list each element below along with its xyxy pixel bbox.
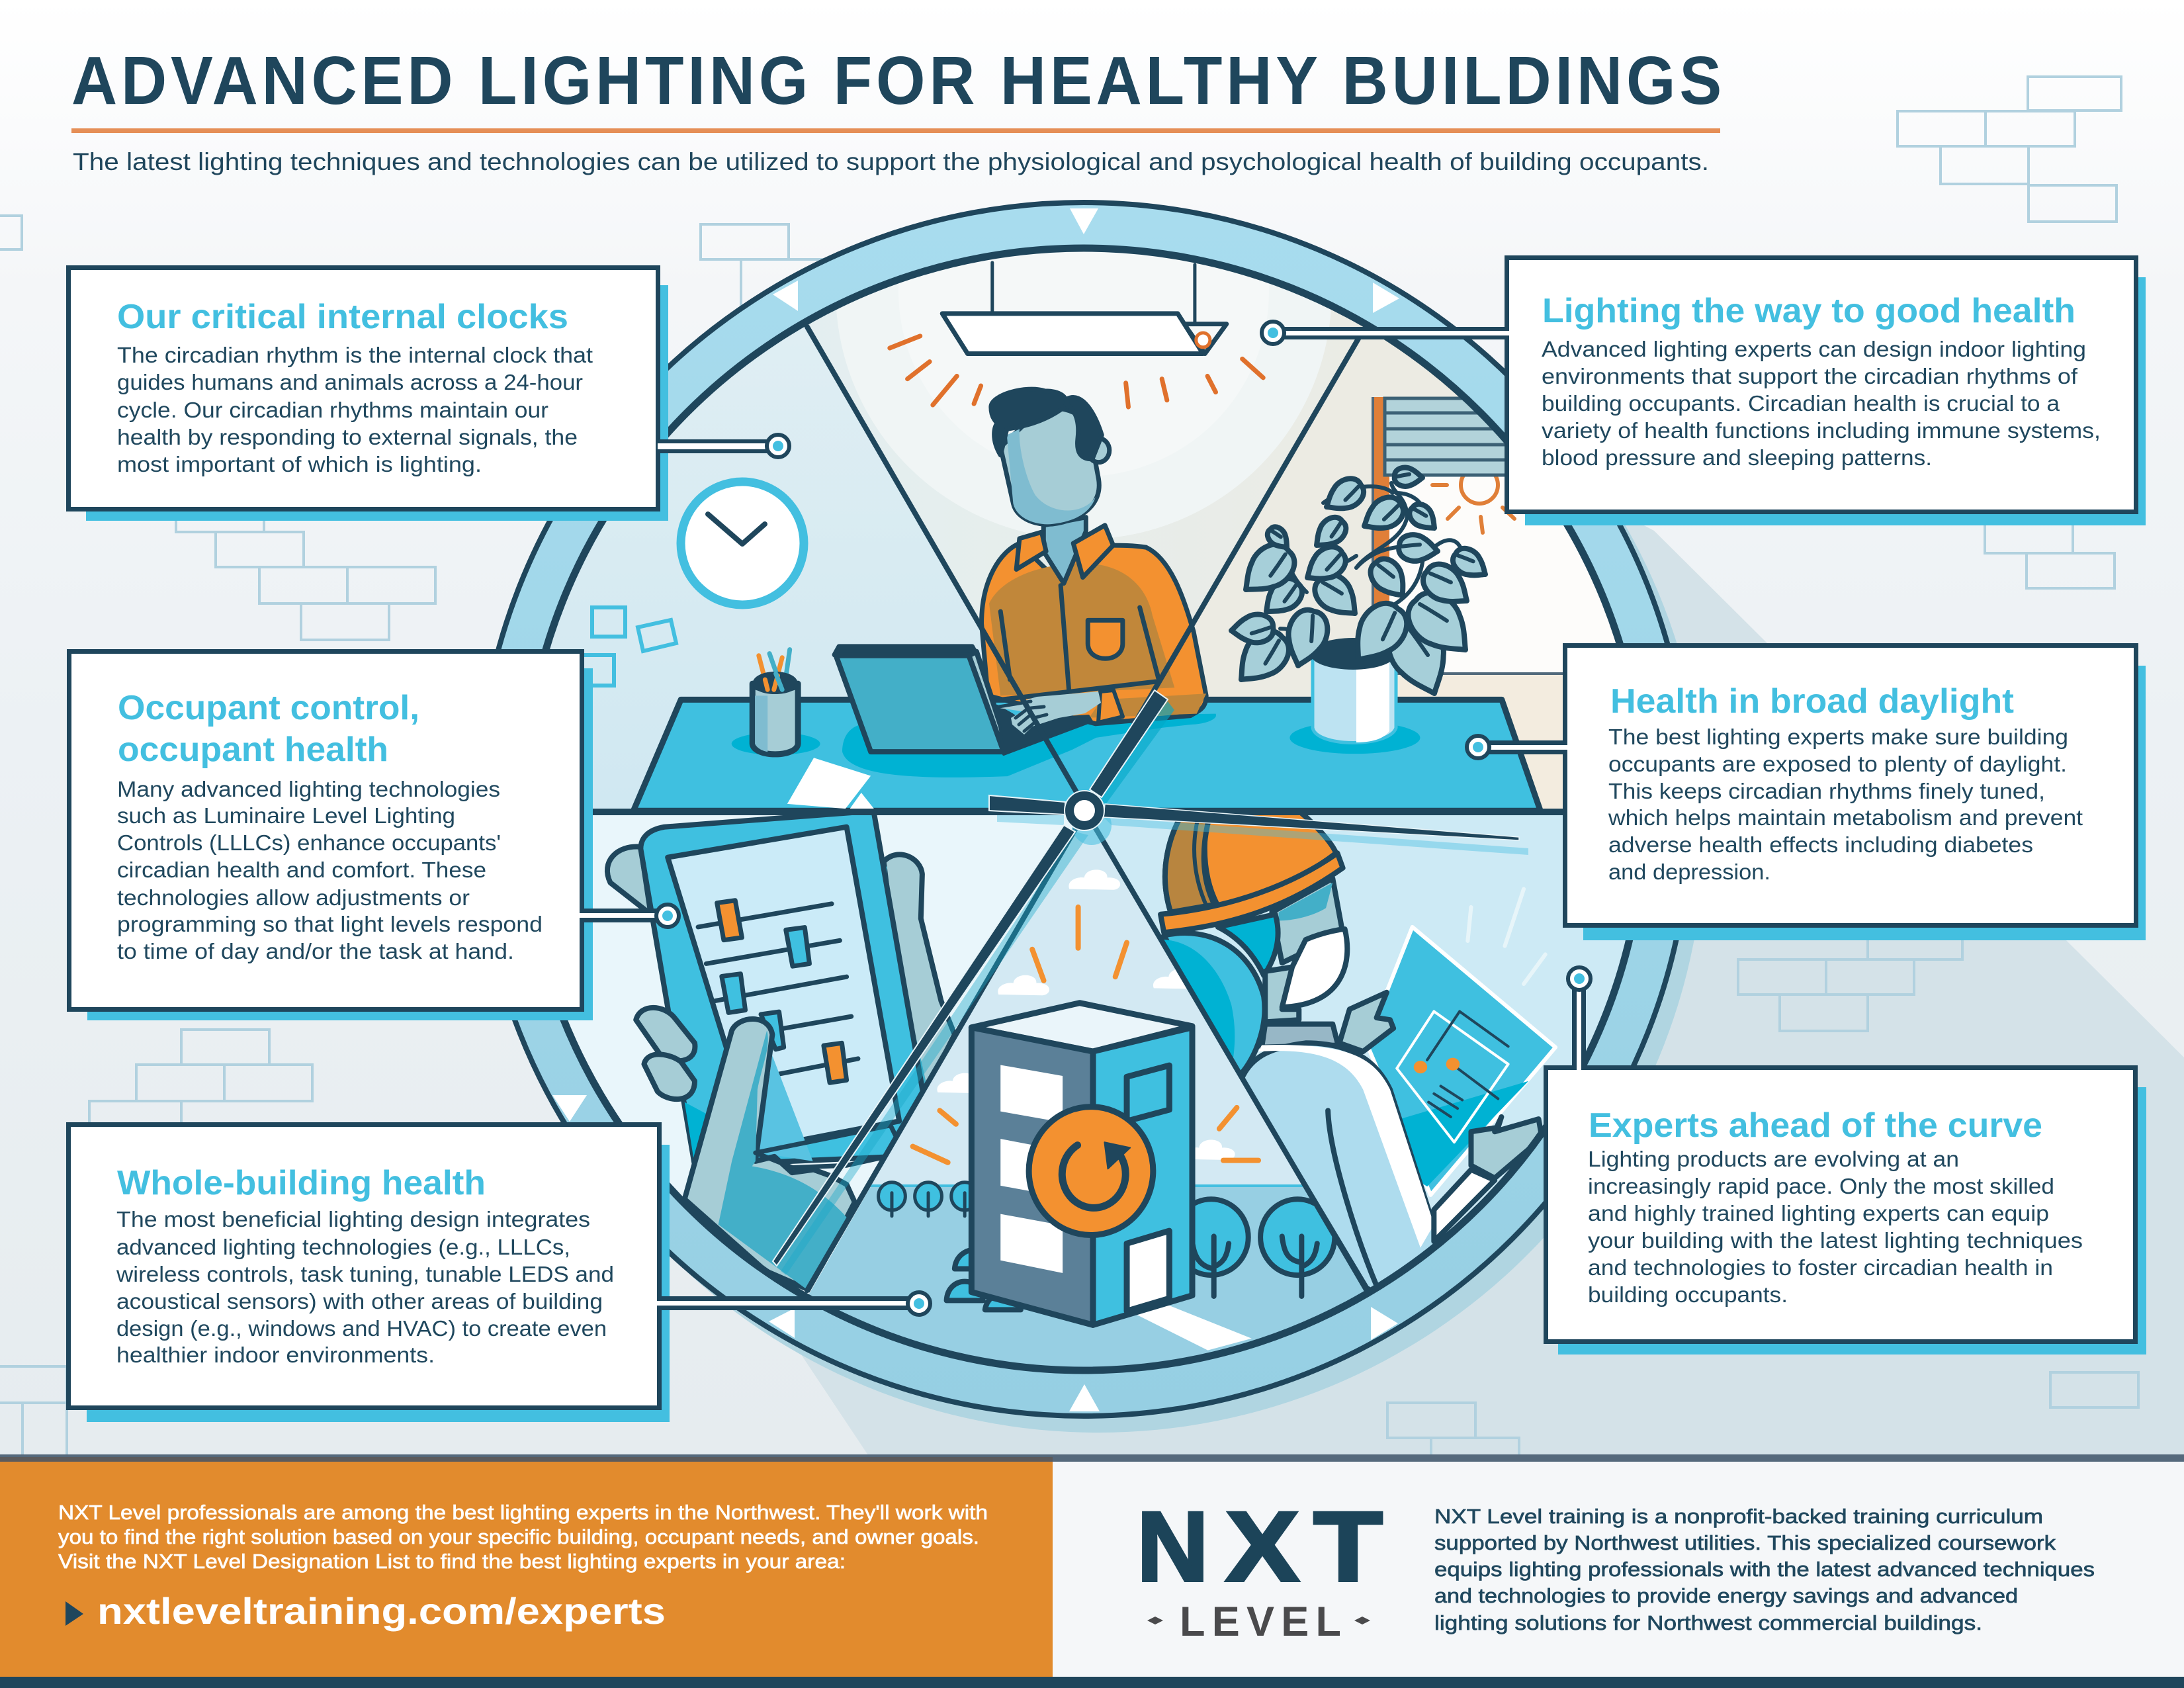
body: Many advanced lighting technologies [117,777,500,801]
heading: Occupant control, [118,689,419,727]
body: This keeps circadian rhythms finely tuned, [1608,779,2045,803]
small trees [879,1182,979,1216]
body: guides humans and animals across a 24-hour [117,370,583,394]
call to action text: NXT Level professionals are among the best lighting experts in the Northwest. They'll work with [58,1501,988,1524]
hair [991,389,1067,455]
bottom wedge scene [808,830,1364,1367]
hard hat [1165,811,1336,912]
road [1133,1305,1252,1351]
bushes [947,1249,1021,1310]
upper left sector [550,327,983,809]
body: and depression. [1608,860,1770,884]
construction worker [1160,811,1555,1292]
about text: NXT Level training is a nonprofit-backed training curriculum [1434,1505,2043,1528]
neck [1043,517,1086,584]
logo: LEVEL [1180,1599,1341,1645]
body [1542,337,2101,470]
body: Lighting products are evolving at an [1588,1147,1959,1171]
body: technologies allow adjustments or [117,885,470,910]
body: such as Luminaire Level Lighting [117,803,455,828]
body: The most beneficial lighting design integrates [116,1207,590,1231]
call to action text: you to find the right solution based on your specific building, occupant needs, and owner goals. [58,1525,979,1548]
connector: clocks [658,435,789,457]
window blinds [1383,397,1505,476]
clock hands [773,690,1528,1275]
illustrated clock face [550,251,1626,1351]
logo: X [1225,1491,1299,1602]
body: adverse health effects including diabetes [1608,832,2033,857]
subtitle: The latest lighting techniques and technologies can be utilized to support the physiological and psychological health of building occupants. [73,148,1709,175]
body: acoustical sensors) with other areas of building [116,1289,603,1313]
body: blood pressure and sleeping patterns. [1542,445,1932,470]
big trees [1174,1199,1334,1296]
lower sectors [568,815,1073,1294]
sun [1432,466,1514,533]
body: most important of which is lighting. [117,452,482,476]
man at laptop [982,389,1206,724]
body: building occupants. Circadian health is crucial to a [1542,391,2060,416]
keyboard base and typing hand [997,690,1123,754]
body: advanced lighting technologies (e.g., LLLCs, [116,1235,570,1259]
panel: lighting the way [1507,258,2146,525]
body: wireless controls, task tuning, tunable LEDS and [116,1262,614,1286]
plant pot [1313,656,1396,742]
body: The circadian rhythm is the internal clock that [117,343,593,367]
clock ring with tick marks [477,202,1705,1433]
connector: lighting [1262,322,1510,344]
body: health by responding to external signals, the [117,425,578,449]
about text [1434,1505,2095,1634]
logo: T [1313,1491,1383,1602]
top wedge light [836,251,1331,618]
footer panel: call to action [0,1457,1053,1677]
paper [787,758,871,809]
worker's hands [1339,993,1393,1051]
footer panel: about [1053,1462,2184,1677]
body: cycle. Our circadian rhythms maintain our [117,398,548,422]
panel: our critical internal clocks [69,267,668,521]
body: Advanced lighting experts can design indoor lighting [1542,337,2086,361]
title: ADVANCED LIGHTING FOR HEALTHY BUILDINGS [71,43,1722,119]
connector: occupant control [580,905,679,927]
laptop [835,646,1008,752]
url: nxtleveltraining.com/experts [97,1590,666,1632]
pen cup [752,650,798,754]
body: programming so that light levels respond [117,912,543,936]
upper right sector wall and window [1194,339,1616,809]
call to action text [58,1501,988,1573]
shadow region [662,503,2184,1459]
inner ring outline [523,248,1645,1370]
white dashes [1467,889,1546,984]
body: occupants are exposed to plenty of daylight. [1608,752,2067,776]
panel: experts ahead of the curve [1546,1068,2146,1355]
tablet and hand [607,811,955,1290]
heading: Experts ahead of the curve [1589,1106,2042,1145]
hand shadows [781,701,1528,1275]
body: Controls (LLLCs) enhance occupants' [117,830,501,855]
body [117,343,593,476]
connector: whole-building [657,1292,930,1315]
footer band [0,1454,2184,1462]
body: your building with the latest lighting techniques [1588,1228,2083,1253]
jacket [1242,1043,1461,1292]
wall clock [681,482,804,605]
head [1000,408,1099,524]
body [1588,1147,2083,1307]
heading: Health in broad daylight [1610,682,2014,721]
body: and technologies to foster circadian health in [1588,1255,2053,1280]
about text: equips lighting professionals with the latest advanced techniques [1434,1558,2095,1581]
heading: occupant health [118,731,388,769]
plant [1227,467,1492,742]
body: circadian health and comfort. These [117,858,486,882]
ceiling light [890,263,1263,407]
panel: health in broad daylight [1565,646,2146,940]
body: environments that support the circadian rhythms of [1542,364,2078,388]
about text: lighting solutions for Northwest commercial buildings. [1434,1611,1982,1634]
heading: Whole-building health [117,1164,486,1202]
panel: whole-building health [69,1125,670,1422]
panel: occupant control [69,651,593,1020]
bottom bar [0,1677,2184,1688]
call to action text: Visit the NXT Level Designation List to find the best lighting experts in your area: [58,1550,846,1573]
desk shadows [732,714,1420,777]
blueprint [1366,927,1555,1195]
arrow [66,1601,83,1626]
head back [1272,879,1343,963]
body: variety of health functions including immune systems, [1542,418,2101,443]
title rule [71,128,1720,133]
body: and highly trained lighting experts can equip [1588,1201,2049,1225]
body: design (e.g., windows and HVAC) to create even [116,1316,607,1341]
face mask [1282,929,1347,1007]
body [1608,725,2083,884]
body: The best lighting experts make sure building [1608,725,2068,749]
desk [633,699,1540,811]
body: to time of day and/or the task at hand. [117,939,514,963]
connector: experts [1568,967,1591,1071]
body [117,777,543,963]
body: which helps maintain metabolism and prevent [1608,805,2083,830]
body: building occupants. [1588,1282,1788,1307]
collar [1016,532,1046,569]
wall squares [582,607,676,686]
connector: daylight [1467,736,1569,758]
shirt [982,543,1206,724]
body [116,1207,614,1367]
rays [913,907,1258,1163]
body: healthier indoor environments. [116,1343,435,1367]
heading: Lighting the way to good health [1542,292,2075,330]
neck [1265,967,1299,1022]
heading: Our critical internal clocks [117,298,568,336]
logo: N [1137,1491,1209,1602]
about text: and technologies to provide energy savings and advanced [1434,1584,2018,1607]
heading [118,689,419,769]
body: increasingly rapid pace. Only the most skilled [1588,1174,2054,1198]
building [971,1003,1192,1325]
about text: supported by Northwest utilities. This specialized coursework [1434,1531,2056,1554]
divider and wedge lines [516,327,1654,1290]
logo [1137,1491,1383,1645]
